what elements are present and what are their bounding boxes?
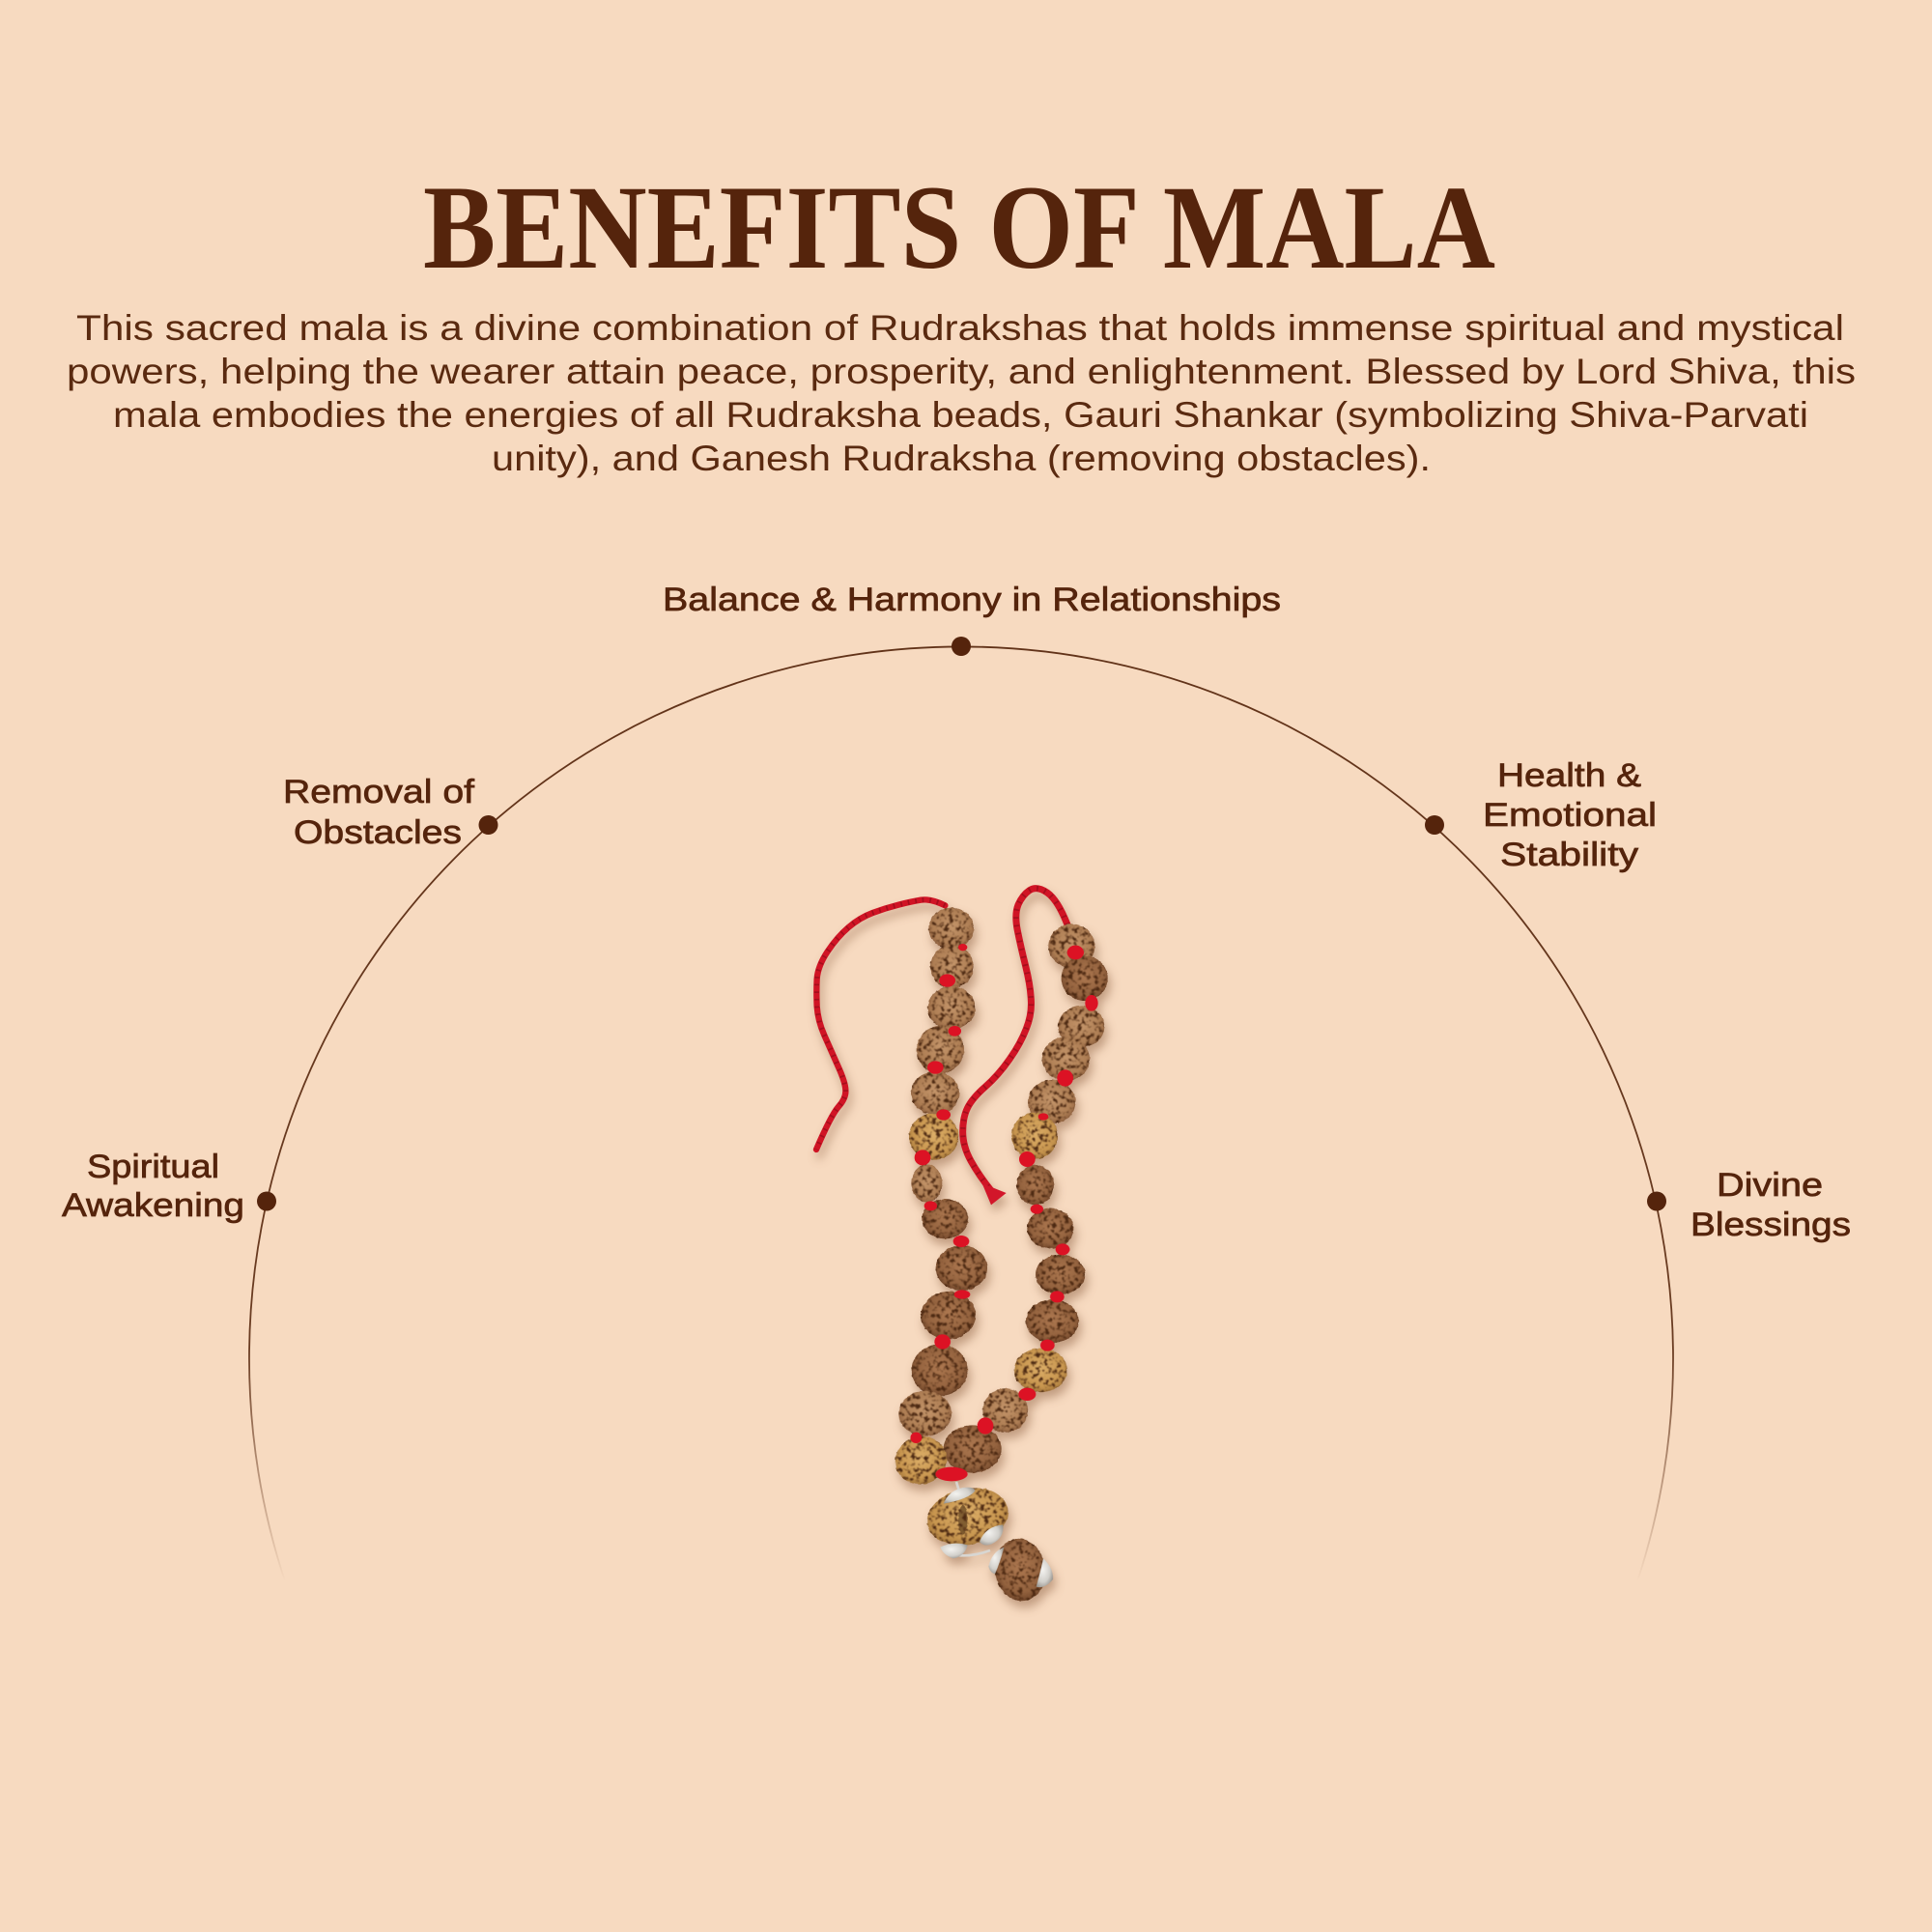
benefit: Balance and Harmony [663,582,1281,656]
benefits arc [249,646,1673,1581]
silver wire [956,1482,990,1555]
lower strands and pendant [890,1236,1085,1605]
title: BENEFITS OF MALA [423,161,1495,294]
benefit: Divine Blessings: Blessings [1690,1207,1851,1243]
benefit: Health and Emotional Stability: Health & [1497,757,1641,794]
benefit: Divine Blessings [1647,1167,1851,1243]
intro paragraph: powers, helping the wearer attain peace, prosperity, and enlightenment. Blessed by Lord Shiva, this [67,352,1856,391]
benefit: Spiritual Awakening: Spiritual [87,1149,219,1185]
lower tan and golden beads [890,1349,1067,1490]
rudraksha mala illustration [816,889,1108,1605]
benefit: Removal of Obstacles [283,774,498,851]
right red thread with tassel [963,889,1067,1205]
benefit: Removal of Obstacles: Removal of [283,774,475,810]
intro paragraph [67,308,1856,478]
benefit: Divine Blessings: Divine [1717,1167,1823,1204]
intro paragraph: unity), and Ganesh Rudraksha (removing obstacles). [492,439,1431,478]
lower beads [912,1245,1085,1473]
red knots [915,944,1098,1214]
benefit: Spiritual Awakening: Awakening [62,1187,244,1224]
tan beads [911,908,1104,1203]
gauri shankar pendant bead [922,1481,1013,1552]
left red thread [816,899,945,1150]
benefit: Removal of Obstacles: Obstacles [294,814,462,851]
intro paragraph: mala embodies the energies of all Rudraksha beads, Gauri Shankar (symbolizing Shiva-Parvati [113,395,1808,435]
benefit: Balance and Harmony: Balance & Harmony in Relationships [663,582,1281,618]
silver caps [940,1488,1053,1587]
lower red knots [910,1236,1069,1481]
benefit: Health and Emotional Stability: Emotional [1483,797,1657,834]
benefit: Health and Emotional Stability: Stability [1500,837,1638,873]
brown and golden beads [909,955,1108,1248]
ganesh pendant bead [991,1535,1049,1605]
upper strands [816,889,1108,1248]
intro paragraph: This sacred mala is a divine combination of Rudrakshas that holds immense spiritual and mystical [76,308,1844,348]
benefit: Spiritual Awakening [62,1149,276,1224]
benefit: Health and Emotional Stability [1425,757,1657,873]
